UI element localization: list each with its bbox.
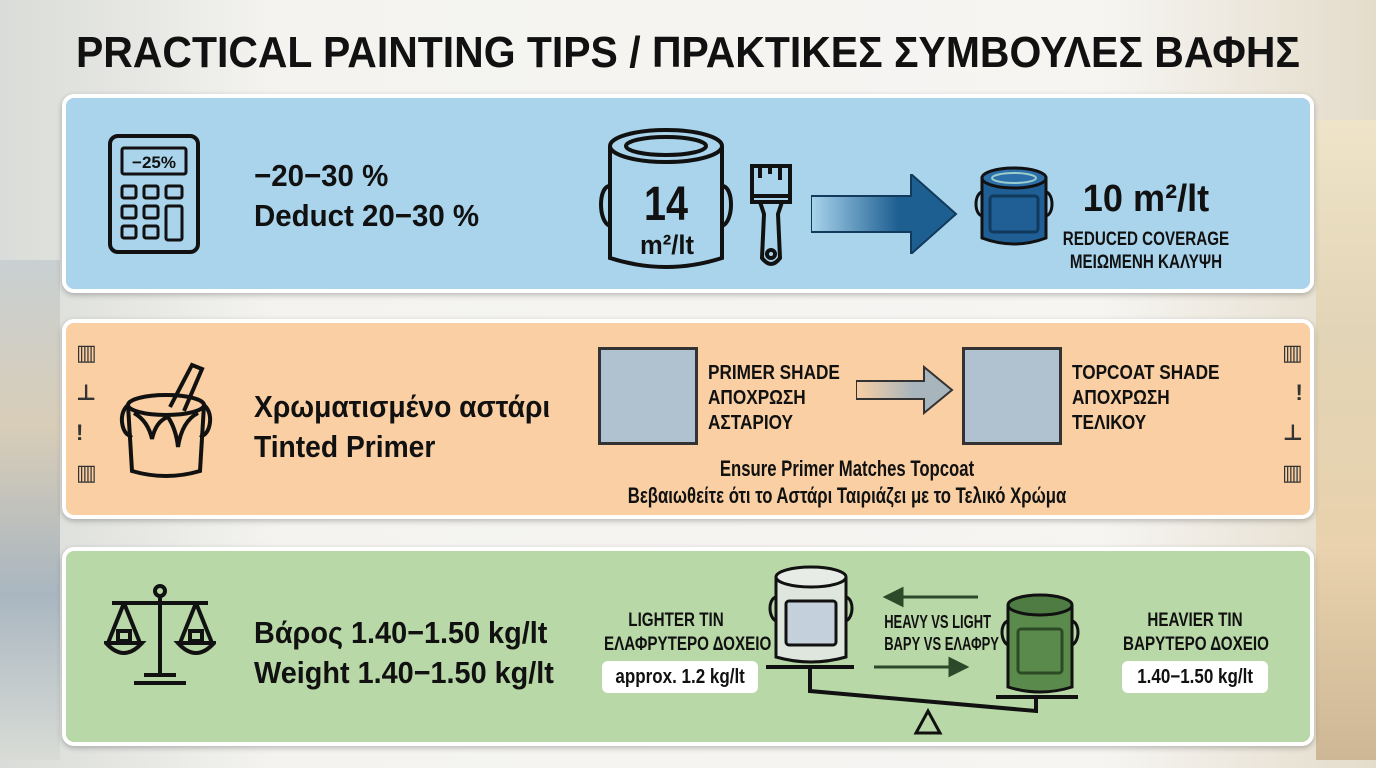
text: reduced coverage: REDUCED COVERAGE [1063,229,1229,250]
text: lighter tin: ΕΛΑΦΡΥΤΕΡΟ ΔΟΧΕΙΟ [604,634,771,655]
text: lighter tin [604,610,771,655]
text: weight: Βάρος 1.40−1.50 kg/lt [254,615,547,650]
text: weight [254,615,554,690]
text: ensure match [628,456,1066,508]
icon: side rollers left: ▥ [76,340,97,365]
icon: calculator: −25% [132,153,176,172]
seesaw with tins [766,566,1080,734]
icon: side rollers right: ▥ [1282,340,1303,365]
arrow: primer to topcoat [856,365,954,415]
icon: paint bucket [120,362,212,478]
text: tinted primer: Tinted Primer [254,429,435,464]
swatch: topcoat [962,347,1062,445]
title: PRACTICAL PAINTING TIPS / ΠΡΑΚΤΙΚΕΣ ΣΥΜΒΟΥΛΕΣ ΒΑΦΗΣ [76,28,1300,77]
text: deduct: −20−30 % [254,158,388,193]
text: primer shade: ΑΣΤΑΡΙΟΥ [708,412,793,434]
text: heavy vs light: ΒΑΡΥ VS ΕΛΑΦΡΥ [884,634,999,654]
icon: side rollers right: ! [1295,380,1303,405]
text: heavier tin: HEAVIER TIN [1147,610,1243,631]
text: tinted primer: Χρωματισμένο αστάρι [254,389,550,424]
icon: calculator [108,134,200,254]
panel: weight [62,547,1314,746]
label: 1.40-1.50 [1122,661,1268,693]
text: reduced coverage: ΜΕΙΩΜΕΝΗ ΚΑΛΥΨΗ [1070,252,1222,273]
text: topcoat shade: ΑΠΟΧΡΩΣΗ [1072,387,1170,409]
label: approx 1.2 [602,661,758,693]
text: 10 m2/lt: 10 m²/lt [1083,178,1209,220]
panel: coverage [62,94,1314,293]
text: heavier tin: ΒΑΡΥΤΕΡΟ ΔΟΧΕΙΟ [1123,634,1269,655]
icon: side rollers left: ⊥ [76,380,96,405]
label: 1.40-1.50: 1.40−1.50 kg/lt [1137,666,1253,688]
icon: side rollers right: ⊥ [1283,420,1303,445]
text: primer shade: ΑΠΟΧΡΩΣΗ [708,387,806,409]
text: heavier tin [1123,610,1269,655]
text: topcoat shade: ΤΕΛΙΚΟΥ [1072,412,1146,434]
icon: side rollers left: ▥ [76,460,97,485]
panel: tinted primer [62,319,1314,519]
icon: scale [104,584,216,685]
text: ensure match: Ensure Primer Matches Topcoat [720,456,974,481]
icon: side rollers left [76,340,97,485]
icon: side rollers right: ▥ [1282,460,1303,485]
text: primer shade [708,362,840,434]
icon: side rollers left: ! [76,420,83,445]
swatch: primer [598,347,698,445]
text: primer shade: PRIMER SHADE [708,362,840,384]
icon: blue tin [974,166,1054,246]
text: lighter tin: LIGHTER TIN [628,610,724,631]
text: tinted primer [254,389,550,464]
icon: large tin 14 [599,128,733,269]
text: ensure match: Βεβαιωθείτε ότι το Αστάρι Ταιριάζει με το Τελικό Χρώμα [628,483,1066,508]
text: reduced coverage [1063,229,1229,273]
icon: side rollers right [1282,340,1303,485]
text: deduct: Deduct 20−30 % [254,198,479,233]
text: heavy vs light: HEAVY VS LIGHT [884,612,991,632]
text: weight: Weight 1.40−1.50 kg/lt [254,655,554,690]
text: deduct [254,158,479,233]
arrow: blue gradient [811,174,958,254]
icon: large tin 14: 14 [644,178,688,231]
icon: brush [750,164,792,266]
label: approx 1.2: approx. 1.2 kg/lt [615,666,745,688]
icon: large tin 14: m²/lt [640,230,694,260]
text: heavy vs light [884,612,999,654]
text: topcoat shade [1072,362,1219,434]
text: topcoat shade: TOPCOAT SHADE [1072,362,1219,384]
